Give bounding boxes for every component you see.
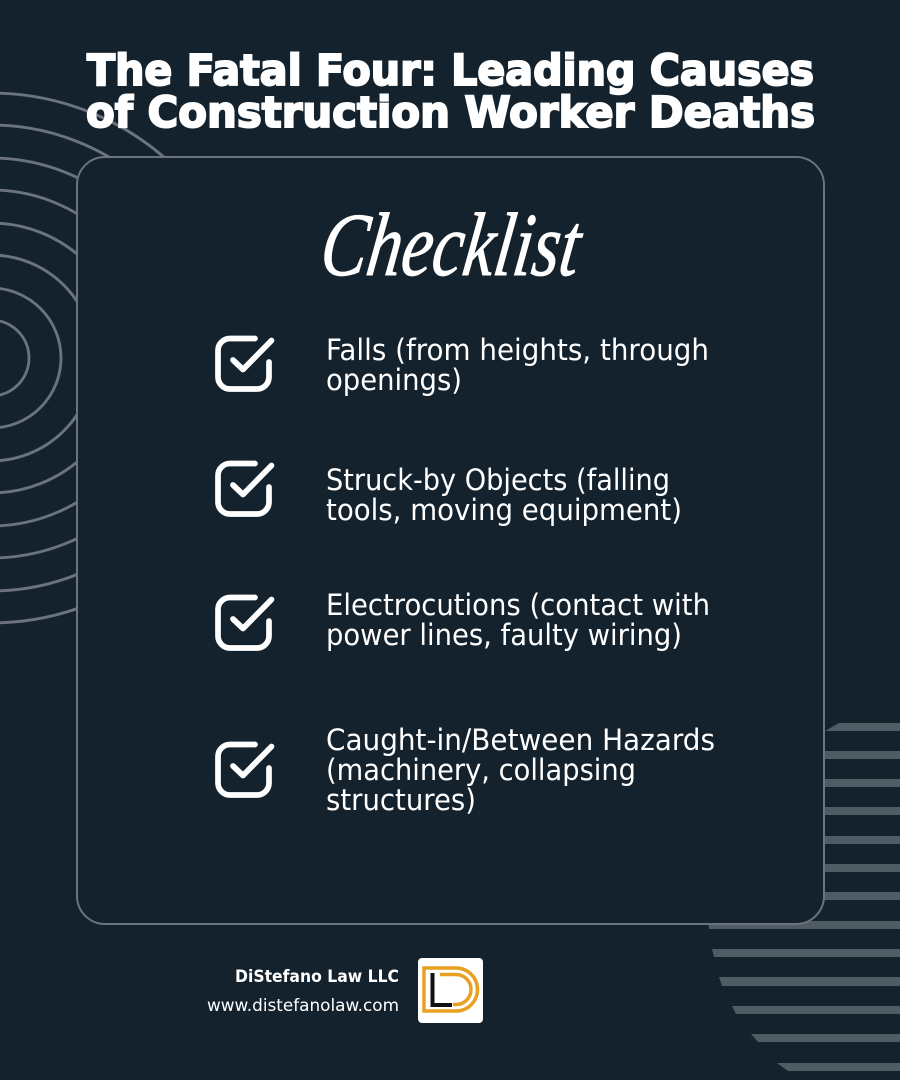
checklist item 4: (machinery, collapsing xyxy=(326,753,636,787)
icon: checkbox 4 xyxy=(218,744,272,795)
icon: DiStefano Law logo xyxy=(418,958,483,1023)
checklist item 3: power lines, faulty wiring) xyxy=(326,618,682,652)
footer: firm name and website: www.distefanolaw.com xyxy=(207,996,399,1016)
checklist item 2: Struck-by Objects (falling xyxy=(326,463,670,497)
icon: checkbox 3 xyxy=(218,598,272,648)
checklist item 3 xyxy=(326,588,710,652)
panel: checklist card xyxy=(77,157,824,924)
icon: checkbox 2 xyxy=(218,464,272,514)
footer: firm name and website: DiStefano Law LLC xyxy=(235,967,399,987)
checklist item 4: structures) xyxy=(326,783,476,817)
checklist item 3: Electrocutions (contact with xyxy=(326,588,710,622)
checklist item 1: openings) xyxy=(326,363,462,397)
checklist item 2 xyxy=(326,463,682,527)
checklist item 1 xyxy=(326,333,709,397)
checklist item 1: Falls (from heights, through xyxy=(326,333,709,367)
title xyxy=(86,46,815,138)
checklist item 2: tools, moving equipment) xyxy=(326,493,682,527)
footer: firm name and website xyxy=(207,967,399,1016)
heading: Checklist: Checklist xyxy=(315,194,589,295)
checklist item 4 xyxy=(326,723,715,817)
checklist item 4: Caught-in/Between Hazards xyxy=(326,723,715,757)
title: The Fatal Four: Leading Causes xyxy=(87,46,814,96)
icon: checkbox 1 xyxy=(218,338,272,389)
title: of Construction Worker Deaths xyxy=(86,88,815,138)
